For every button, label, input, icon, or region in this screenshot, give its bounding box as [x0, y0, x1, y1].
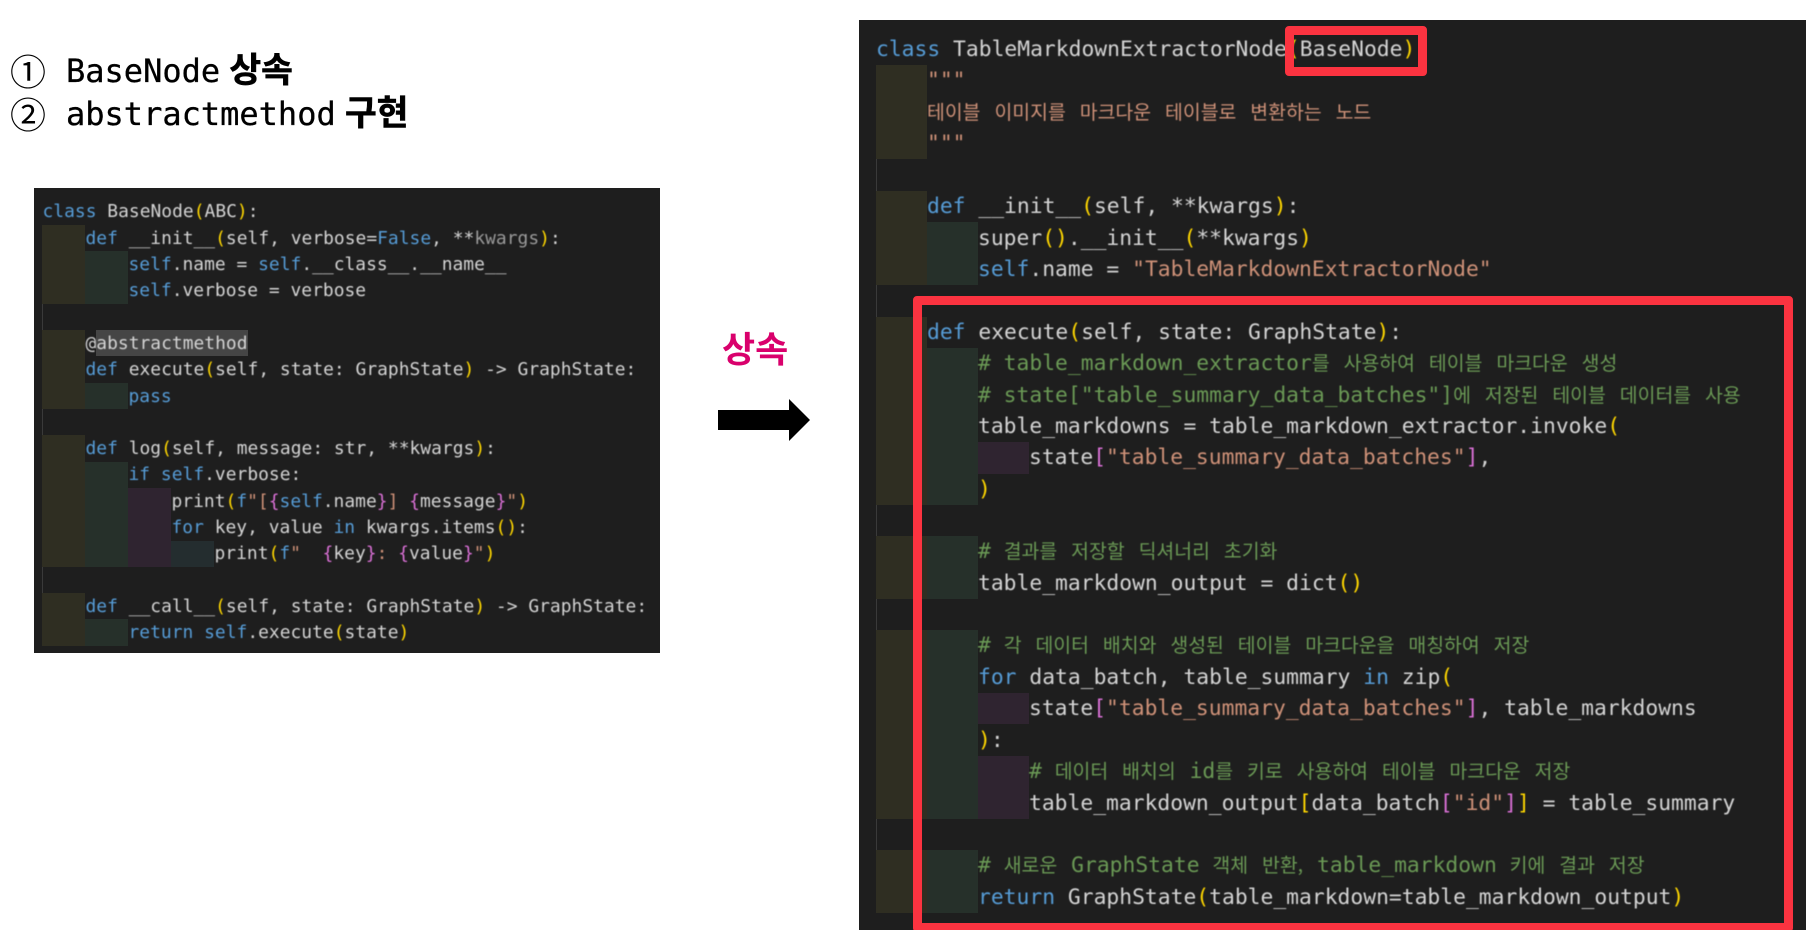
- code lines: def execute(self, state: GraphState):: [927, 320, 1402, 345]
- code lines: # state["table_summary_data_batches"]에 저장된 테이블 데이터를 사용: [978, 378, 1741, 408]
- code lines: table_markdown_output = dict(): [978, 570, 1363, 596]
- code lines: """: [927, 131, 966, 156]
- code lines: def __init__(self, verbose=False, **kwargs):: [86, 228, 561, 248]
- code lines: table_markdown_output[data_batch["id"]] = table_summary: [1029, 790, 1735, 816]
- code lines: # table_markdown_extractor를 사용하여 테이블 마크다운 생성: [978, 347, 1617, 376]
- code lines: [42, 201, 647, 643]
- code lines: ): [978, 477, 991, 502]
- code lines: class TableMarkdownExtractorNode(BaseNode): [876, 37, 1415, 62]
- panel: BaseNode code: [34, 188, 660, 653]
- code lines: """: [927, 68, 966, 93]
- code lines: ):: [978, 728, 1004, 752]
- code lines: 테이블 이미지를 마크다운 테이블로 변환하는 노드: [927, 96, 1371, 125]
- code lines: # 결과를 저장할 딕셔너리 초기화: [978, 535, 1277, 564]
- step 1 number: ①: [10, 44, 46, 96]
- code lines: self.verbose = verbose: [128, 280, 366, 301]
- code lines: if self.verbose:: [128, 464, 301, 485]
- heading: steps list: [10, 42, 408, 139]
- indent guide bands: [876, 65, 1029, 913]
- code lines: table_markdowns = table_markdown_extractor.invoke(: [978, 414, 1620, 439]
- step 2 number: ②: [10, 87, 46, 139]
- panel: TableMarkdownExtractorNode code: [859, 20, 1806, 930]
- step 2 text: abstractmethod 구현: [66, 85, 408, 135]
- code lines: class BaseNode(ABC):: [42, 201, 259, 222]
- code lines: # 각 데이터 배치와 생성된 테이블 마크다운을 매칭하여 저장: [978, 629, 1529, 658]
- code lines: def __call__(self, state: GraphState) -> GraphState:: [86, 596, 647, 616]
- indent guide bands: [42, 225, 248, 646]
- code lines: # 데이터 배치의 id를 키로 사용하여 테이블 마크다운 저장: [1029, 755, 1570, 784]
- code lines: super().__init__(**kwargs): [978, 226, 1312, 250]
- highlight box: execute method: [913, 296, 1793, 932]
- code lines: print(f"[{self.name}] {message}"): [172, 490, 528, 512]
- code lines: for key, value in kwargs.items():: [172, 517, 528, 538]
- code lines: print(f" {key}: {value}"): [214, 543, 495, 564]
- code lines: return self.execute(state): [128, 622, 409, 643]
- code lines: def log(self, message: str, **kwargs):: [86, 438, 496, 459]
- code lines: state["table_summary_data_batches"], table_markdowns: [1029, 696, 1697, 721]
- code lines: self.name = self.__class__.__name__: [128, 254, 506, 274]
- code lines: self.name = "TableMarkdownExtractorNode": [978, 257, 1492, 282]
- label: inheritance: 상속: [722, 321, 788, 373]
- code lines: def execute(self, state: GraphState) -> GraphState:: [86, 359, 636, 380]
- code lines: # 새로운 GraphState 객체 반환, table_markdown 키에 결과 저장: [978, 849, 1645, 878]
- code lines: def __init__(self, **kwargs):: [927, 194, 1299, 219]
- step 1 text: BaseNode 상속: [66, 42, 293, 92]
- code lines: @abstractmethod: [86, 332, 248, 354]
- code lines: for data_batch, table_summary in zip(: [978, 665, 1453, 690]
- code lines: pass: [128, 386, 172, 406]
- code lines: return GraphState(table_markdown=table_markdown_output): [978, 884, 1684, 910]
- arrow: inheritance direction: [718, 399, 810, 441]
- code lines: state["table_summary_data_batches"],: [1029, 445, 1491, 470]
- code lines: [876, 37, 1741, 910]
- highlight box: BaseNode parent class: [1285, 26, 1427, 76]
